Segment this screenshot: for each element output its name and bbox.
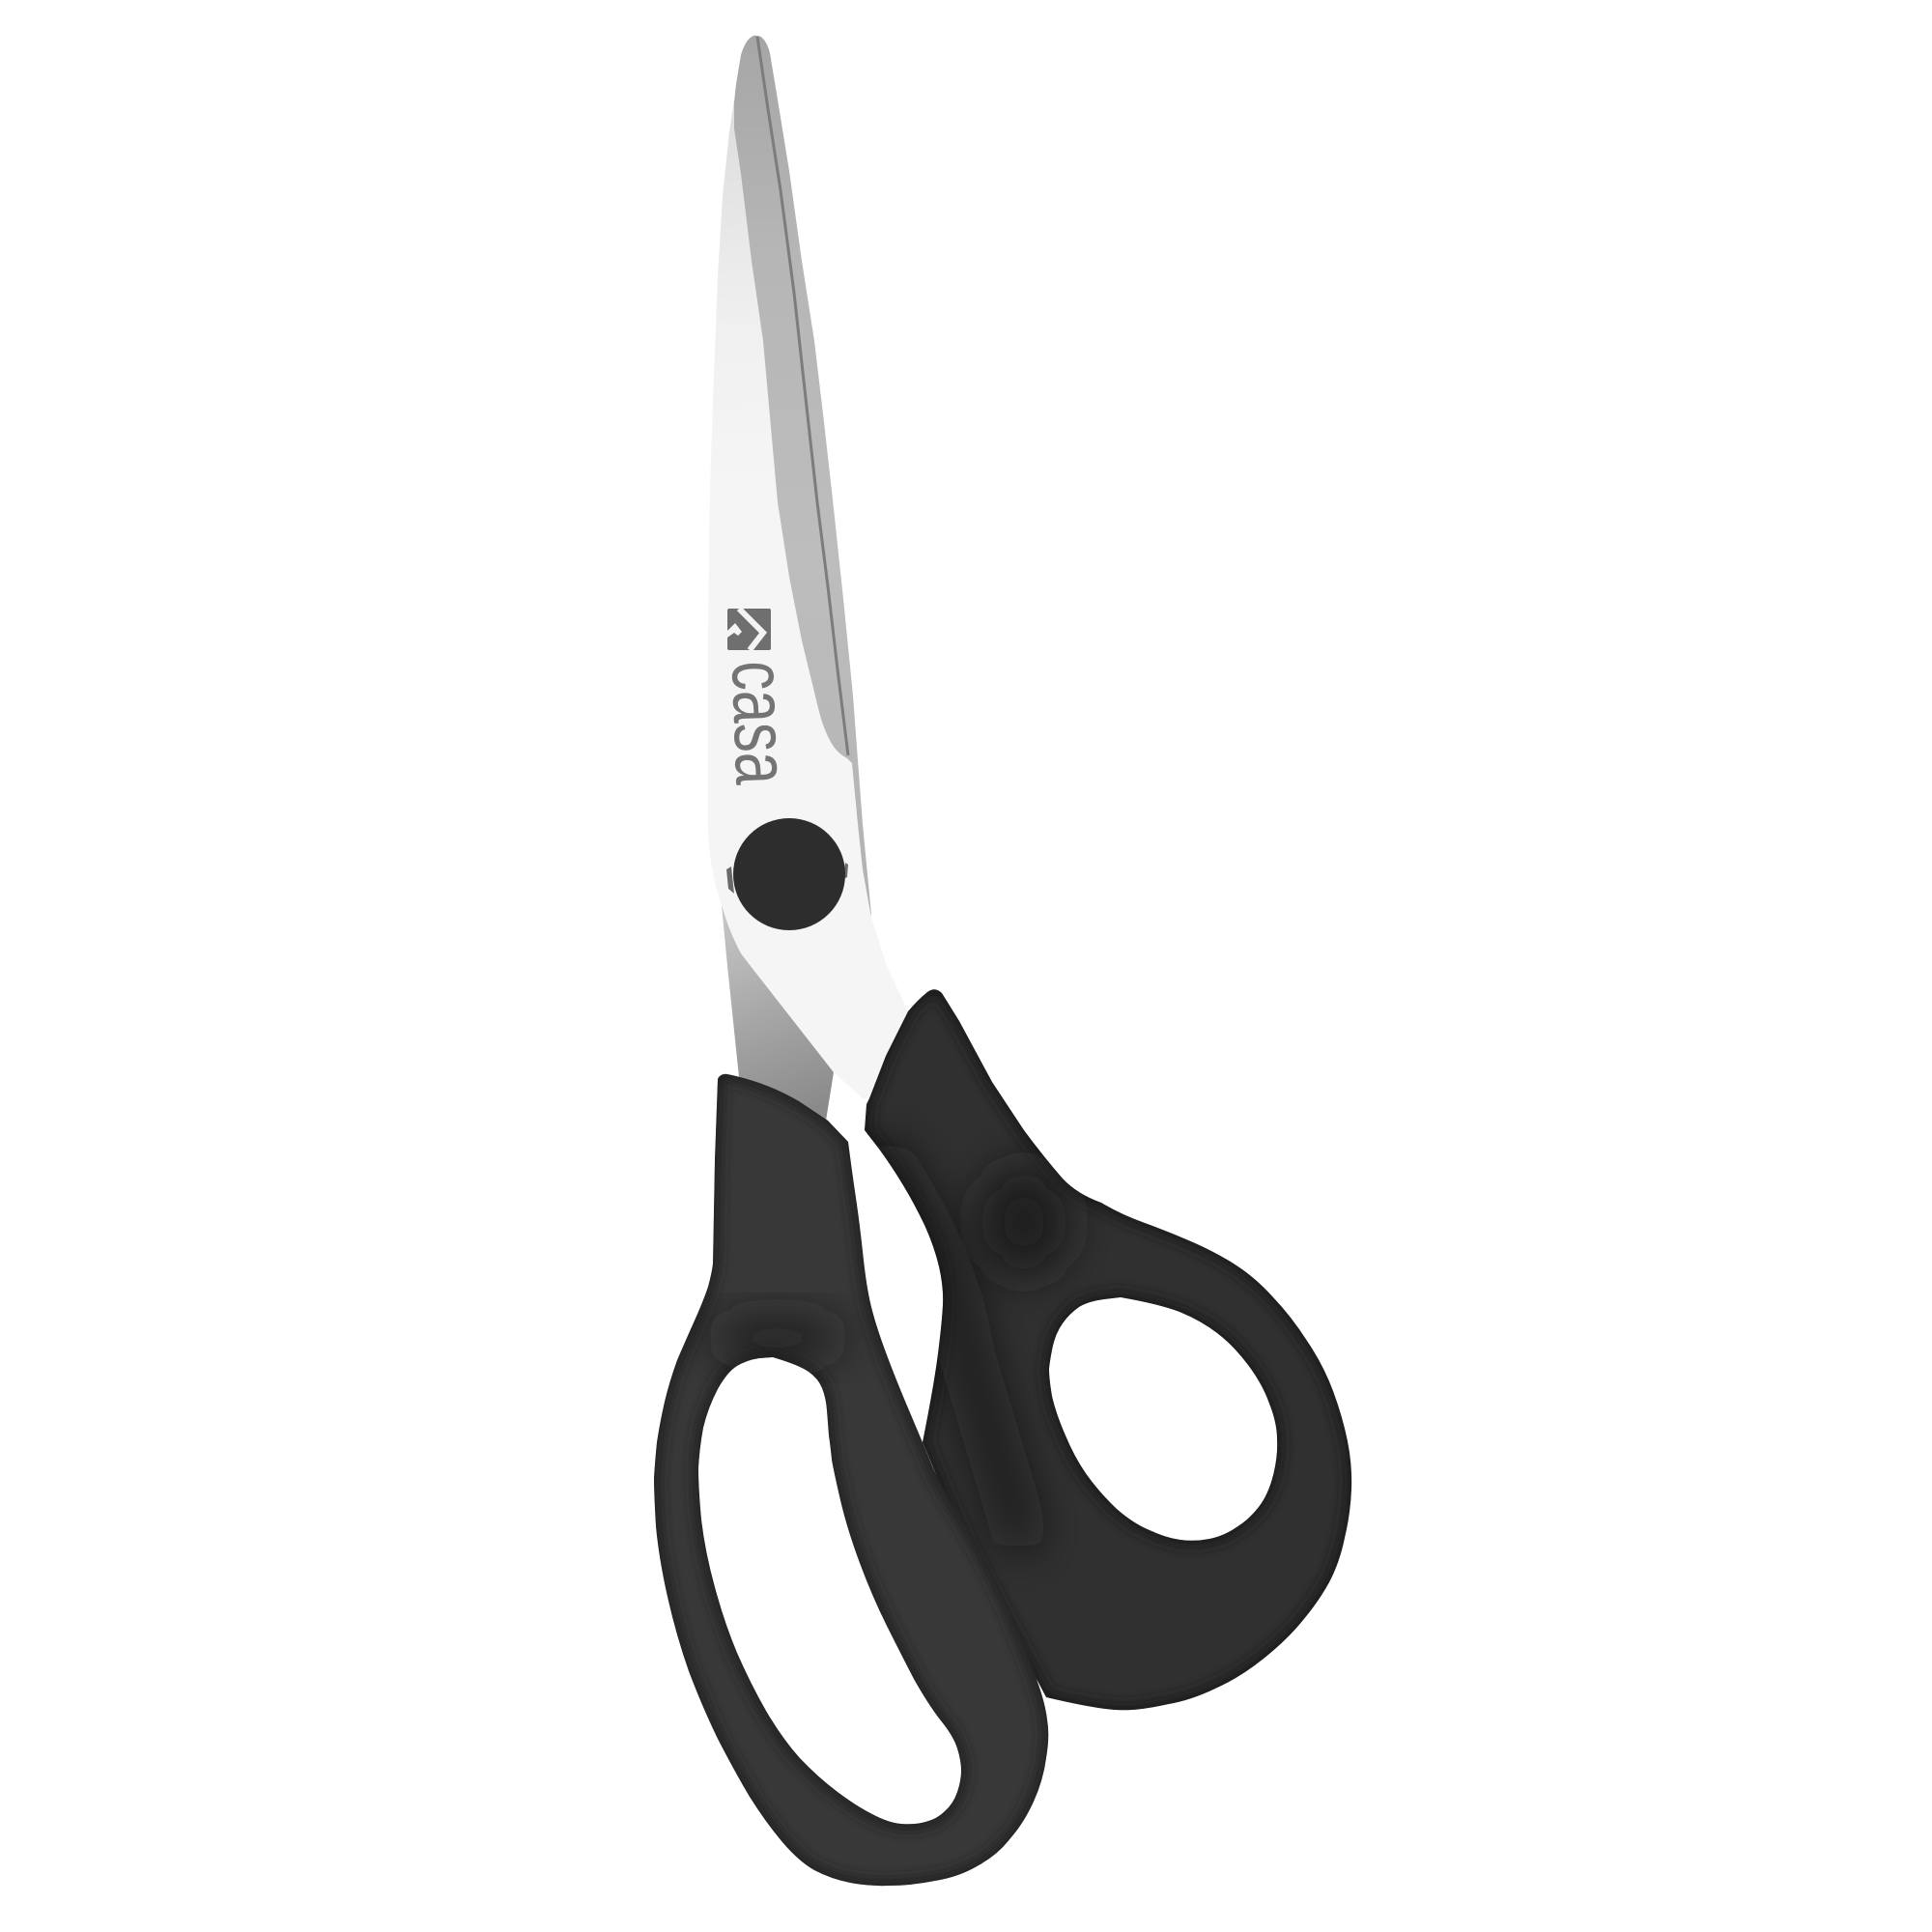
right handle ring [865, 989, 1351, 1710]
shaded inner edge [878, 1148, 1024, 1546]
blade cutting line [757, 37, 848, 755]
left handle ring [654, 1074, 1048, 1886]
brand logo: casa [716, 609, 806, 786]
upper blade ground edge [731, 36, 871, 927]
shaded hollow near ring neck [980, 1169, 1067, 1275]
pivot screw [726, 818, 848, 930]
shaded hollow at ring top [710, 1321, 845, 1355]
logo wordmark: casa [716, 659, 806, 786]
lower blade [722, 905, 834, 1121]
logo mark [727, 609, 771, 650]
upper blade steel body [708, 99, 908, 1098]
product image: scissors [654, 35, 1352, 1886]
